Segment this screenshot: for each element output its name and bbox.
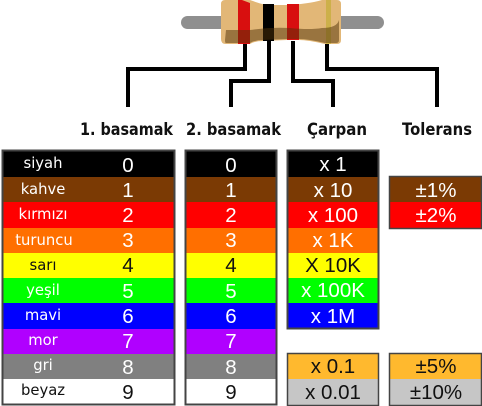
heading: column titles: Tolerans <box>402 120 472 139</box>
heading: column titles <box>80 120 472 139</box>
panel: first digit: 9 <box>122 381 134 404</box>
panel: first digit: sarı <box>30 257 56 274</box>
panel: second digit: 8 <box>225 356 237 379</box>
panel: multiplier gold and silver <box>287 354 379 406</box>
panel: first digit: turuncu <box>15 232 73 249</box>
panel: multiplier: x 1K <box>312 229 354 252</box>
panel: multiplier: x 1 <box>319 153 347 176</box>
panel: tolerance gold and silver: ±5% <box>416 355 456 378</box>
panel: first digit: 2 <box>122 204 134 227</box>
panel: second digit: 3 <box>225 229 237 252</box>
panel: multiplier: X 10K <box>305 254 361 277</box>
panel: multiplier <box>287 150 379 329</box>
panel: multiplier gold and silver: x 0.01 <box>305 381 361 404</box>
panel: tolerance brown and red <box>390 176 482 229</box>
panel: first digit: kırmızı <box>19 206 67 223</box>
panel: second digit: 0 <box>225 154 237 177</box>
panel: first digit <box>2 150 175 404</box>
panel: first digit: 3 <box>122 229 134 252</box>
panel: second digit: 6 <box>225 305 237 328</box>
panel: multiplier: x 100 <box>308 204 358 227</box>
connector lines <box>128 41 437 107</box>
panel: multiplier: x 10 <box>314 179 352 202</box>
heading: column titles: 2. basamak <box>186 120 282 139</box>
panel: first digit: 7 <box>122 330 134 353</box>
panel: multiplier: x 1M <box>311 305 355 328</box>
panel: second digit: 7 <box>225 330 237 353</box>
panel: second digit: 4 <box>225 254 237 277</box>
panel: first digit: 1 <box>122 179 134 202</box>
panel: second digit: 2 <box>225 204 237 227</box>
panel: first digit: siyah <box>23 155 63 172</box>
panel: second digit: 9 <box>225 381 237 404</box>
heading: column titles: Çarpan <box>307 120 367 139</box>
panel: second digit: 5 <box>225 280 237 303</box>
panel: first digit: mavi <box>25 307 61 324</box>
panel: first digit: yeşil <box>26 282 60 299</box>
panel: first digit: 4 <box>122 254 134 277</box>
icon: resistor <box>181 0 384 44</box>
panel: first digit: 6 <box>122 305 134 328</box>
panel: first digit: mor <box>28 332 59 349</box>
heading: column titles: 1. basamak <box>80 120 174 139</box>
panel: tolerance brown and red: ±2% <box>416 204 456 227</box>
panel: first digit: 8 <box>122 356 134 379</box>
panel: first digit: gri <box>33 357 53 374</box>
panel: multiplier gold and silver: x 0.1 <box>311 355 355 378</box>
panel: second digit <box>185 150 277 404</box>
panel: first digit: 5 <box>122 280 134 303</box>
panel: first digit: beyaz <box>21 382 65 399</box>
panel: first digit: kahve <box>21 181 65 198</box>
panel: tolerance brown and red: ±1% <box>416 179 456 202</box>
panel: multiplier: x 100K <box>301 279 365 302</box>
panel: first digit: 0 <box>122 154 134 177</box>
panel: tolerance gold and silver <box>390 354 482 406</box>
panel: second digit: 1 <box>225 179 237 202</box>
panel: tolerance gold and silver: ±10% <box>410 381 462 404</box>
